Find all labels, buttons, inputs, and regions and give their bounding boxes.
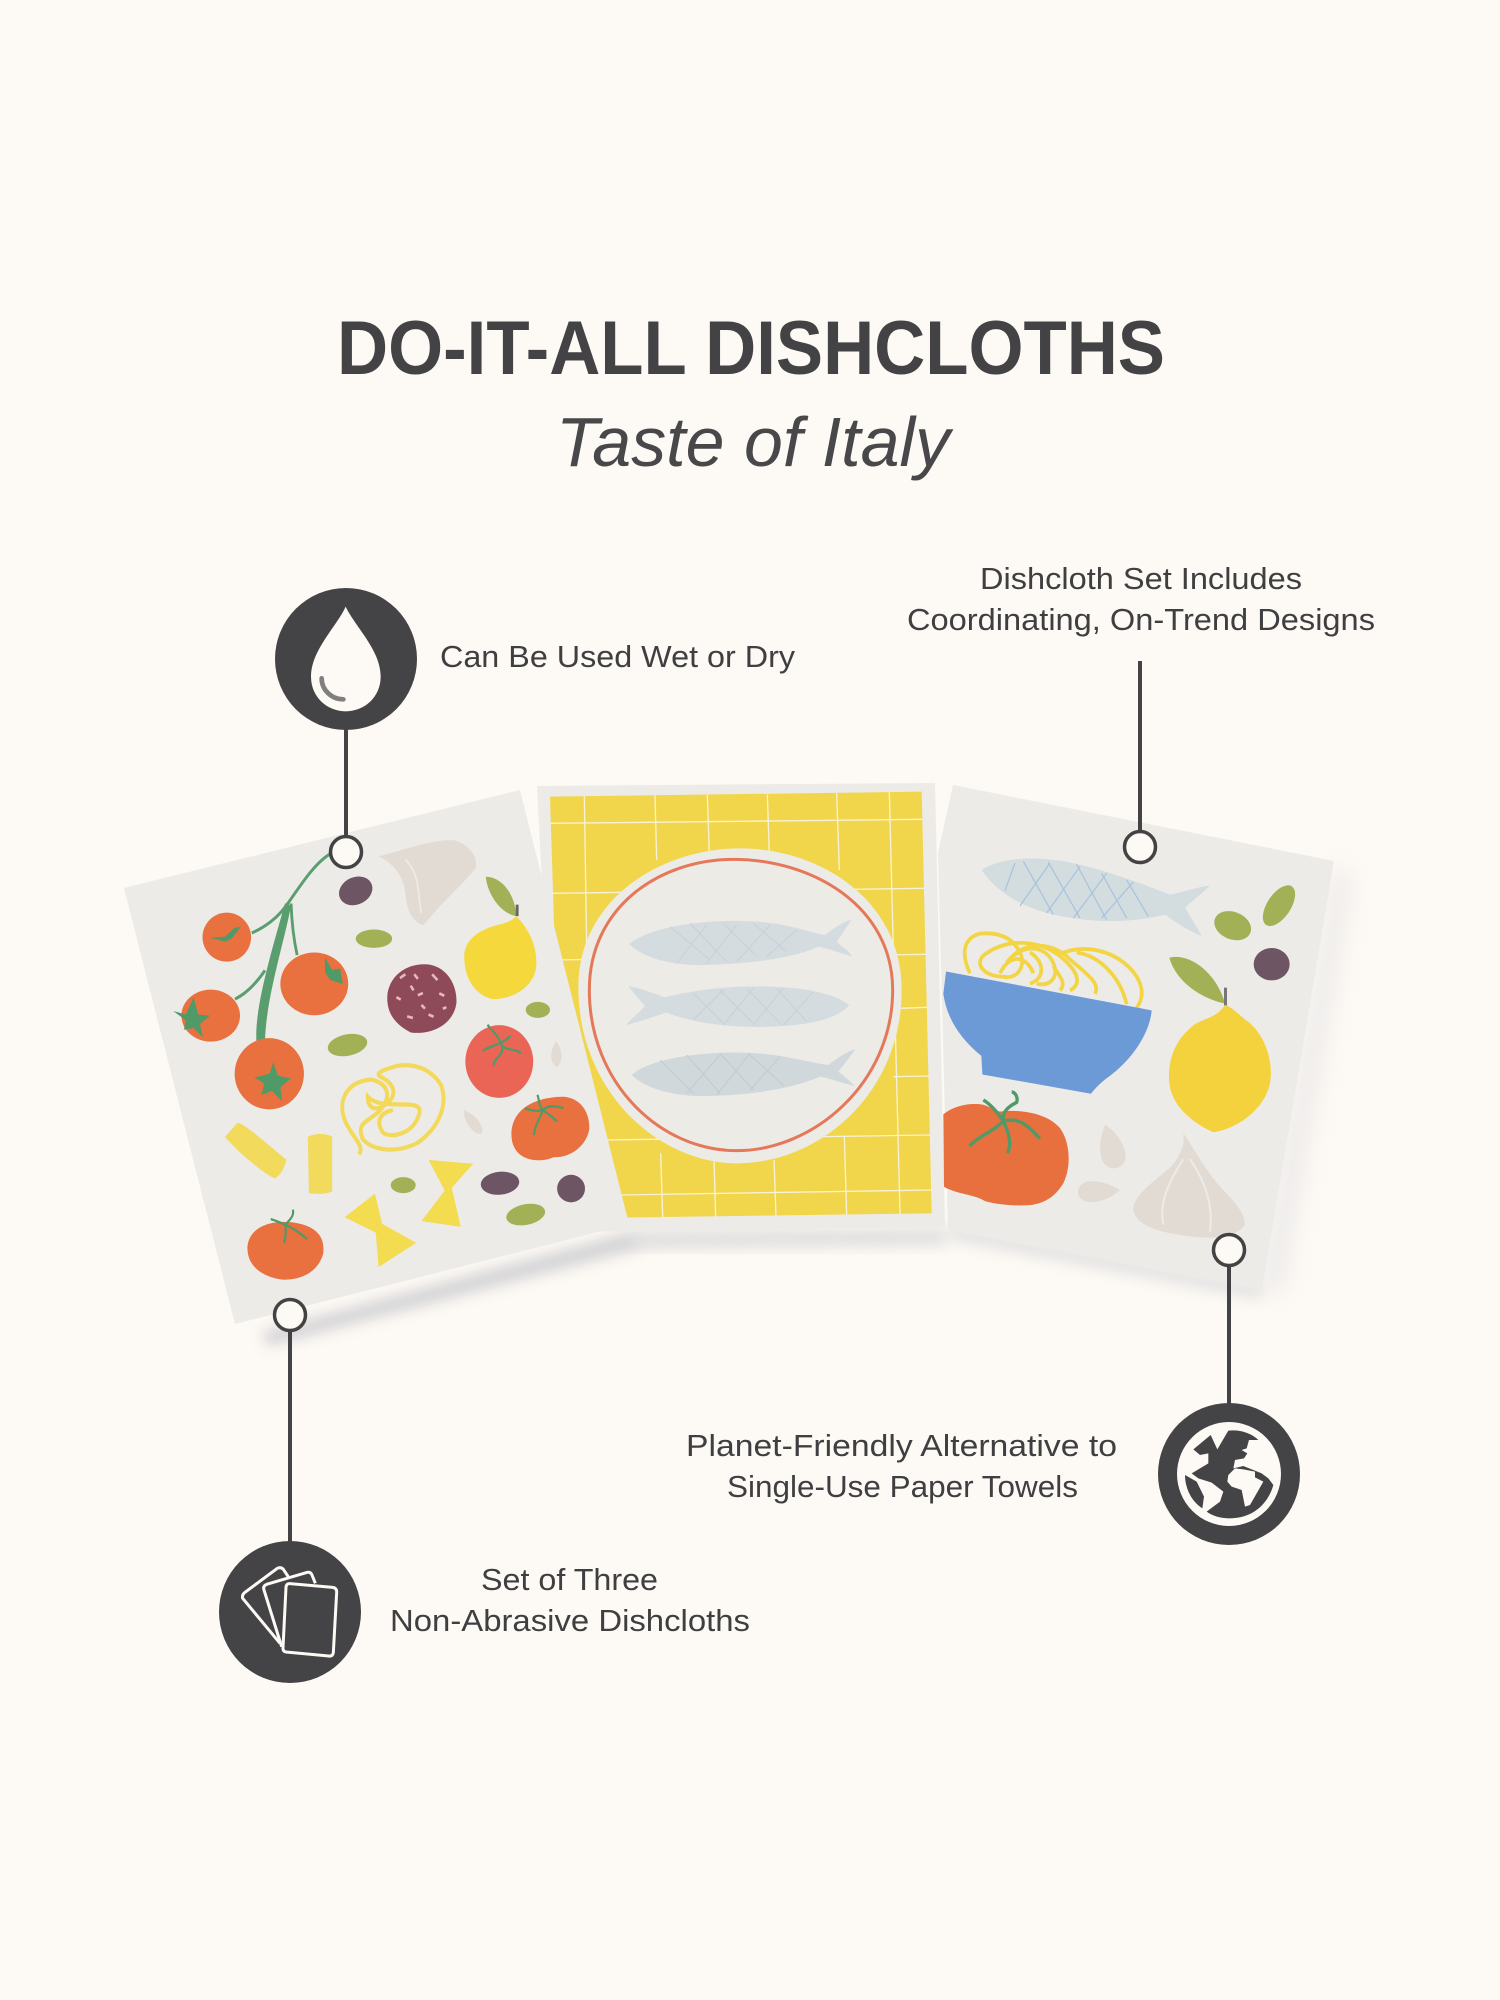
lemon — [464, 877, 536, 999]
plate — [578, 848, 902, 1163]
callout: planet friendly — [686, 1234, 1300, 1545]
icon: water drop — [275, 588, 417, 730]
label: Set of Three — [481, 1562, 658, 1597]
sardine — [982, 859, 1210, 936]
sardine 1 — [629, 919, 852, 965]
spaghetti — [965, 933, 1142, 1008]
subtitle: Taste of Italy — [556, 403, 954, 481]
marker — [1214, 1234, 1244, 1266]
leaf — [1169, 957, 1225, 1003]
olives — [1210, 880, 1302, 980]
marker — [1124, 832, 1156, 862]
marker — [330, 836, 362, 868]
label — [686, 1428, 1117, 1504]
connector line — [1227, 1265, 1231, 1410]
label: Non-Abrasive Dishcloths — [390, 1603, 750, 1638]
rigatoni — [225, 1123, 332, 1194]
olives — [326, 872, 585, 1228]
callout: set of three — [219, 1300, 750, 1683]
garlic — [379, 840, 561, 1134]
lemon — [1169, 1005, 1271, 1132]
label: Coordinating, On-Trend Designs — [907, 602, 1375, 637]
marker — [274, 1300, 306, 1330]
tomato — [943, 1092, 1069, 1205]
tomatoes — [173, 913, 589, 1280]
connector line — [288, 1330, 292, 1545]
sardine 2 — [626, 986, 849, 1027]
connector line — [1138, 661, 1142, 832]
label: Can Be Used Wet or Dry — [440, 639, 796, 674]
vine — [235, 854, 330, 1041]
panel: left dishcloth, tomatoes and pasta — [124, 790, 629, 1324]
title: DO-IT-ALL DISHCLOTHS — [337, 306, 1165, 391]
sardine 3 — [632, 1049, 855, 1096]
garlic — [1078, 1125, 1245, 1238]
icon: globe — [1158, 1403, 1300, 1545]
label: Dishcloth Set Includes — [980, 561, 1302, 596]
connector line — [344, 725, 348, 836]
card shadows — [262, 865, 1350, 1346]
bowl — [943, 971, 1152, 1094]
label — [907, 561, 1375, 637]
lemon stem — [1224, 988, 1227, 1006]
farfalle — [345, 1160, 473, 1267]
spaghetti — [342, 1065, 443, 1154]
panel: centre dishcloth, sardine plate — [537, 783, 945, 1232]
yellow tablecloth — [550, 792, 932, 1218]
callout: coordinating designs — [907, 561, 1375, 862]
callout: can be used wet or dry — [275, 588, 796, 868]
panel: right dishcloth, pasta bowl — [938, 785, 1334, 1290]
label — [390, 1562, 750, 1638]
salami — [387, 964, 456, 1033]
label: Planet-Friendly Alternative to — [686, 1428, 1117, 1463]
plate rim — [589, 859, 893, 1151]
label: Single-Use Paper Towels — [727, 1469, 1078, 1504]
icon: three cloths — [219, 1541, 361, 1683]
